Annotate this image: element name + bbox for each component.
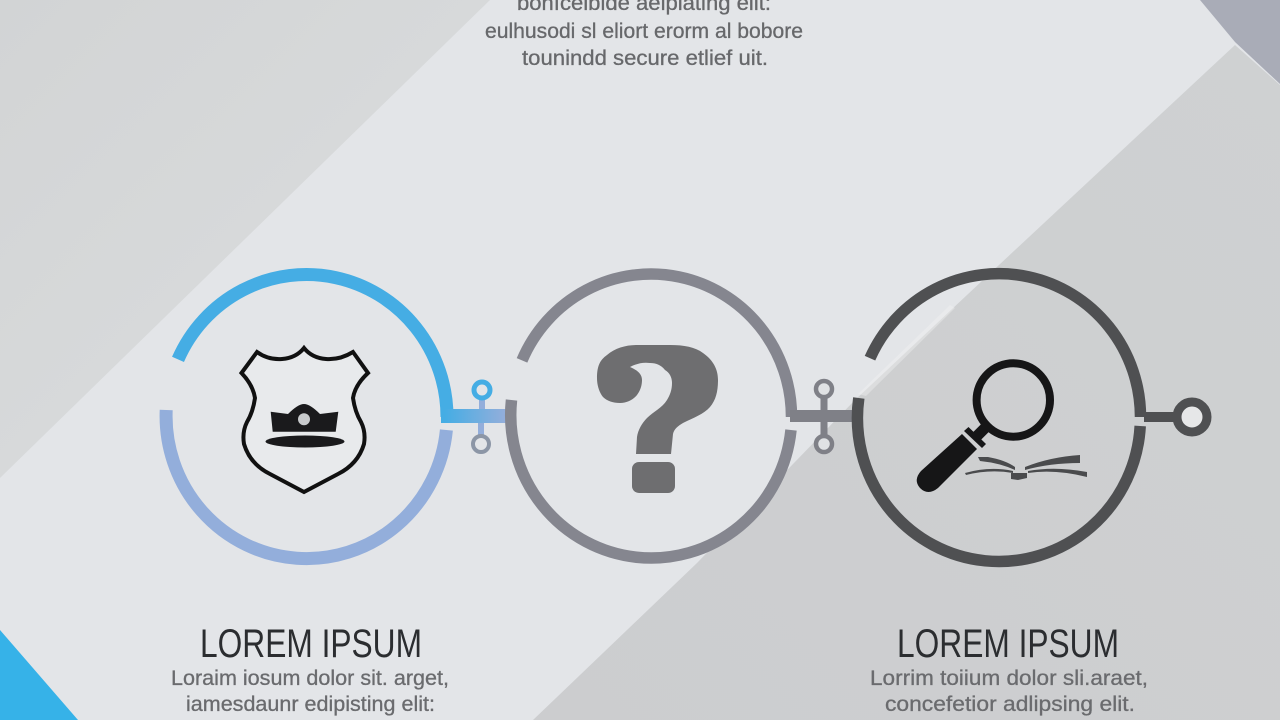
icon: police shield with cap (242, 348, 368, 492)
background: bottom-left blue triangle (0, 630, 78, 720)
text block: left description (171, 667, 449, 716)
ring: upper arc (870, 274, 1140, 417)
text block: right description: concefetior adlipsing elit. (885, 693, 1135, 716)
icon: magnifying glass (917, 363, 1050, 492)
connector: step 2 to step 3 (790, 381, 854, 452)
ring: upper arc (522, 274, 792, 417)
background: lower-right grey panel (533, 45, 1280, 720)
icon: open book (965, 455, 1087, 480)
ring: lower arc (857, 398, 1140, 561)
connector: end node (1144, 402, 1207, 432)
text block: right description (870, 667, 1148, 716)
step 2: question circle (511, 274, 792, 558)
connector: step 1 to step 2 (441, 382, 507, 452)
icon: question mark (597, 345, 718, 493)
text block: right description: Lorrim toiium dolor sli.araet, (870, 667, 1148, 690)
ring: periwinkle lower arc (166, 410, 446, 559)
text block: left description: Loraim iosum dolor sit. arget, (171, 667, 449, 690)
ring: lower arc (511, 400, 791, 558)
step 3: magnifier circle (857, 274, 1207, 561)
background: upper-left grey panel (0, 0, 490, 478)
ring: blue upper arc (178, 275, 447, 417)
heading: left label: LOREM IPSUM (200, 622, 422, 666)
top text block: tounindd secure etlief uit. (522, 47, 768, 70)
top text block: eulhusodi sl eliort erorm al bobore (485, 20, 803, 43)
background: top-right dark corner (1200, 0, 1280, 84)
step 1: shield circle (166, 275, 447, 559)
heading: right label: LOREM IPSUM (897, 622, 1119, 666)
top text block (485, 0, 803, 70)
text block: left description: iamesdaunr edipisting elit: (186, 693, 435, 716)
